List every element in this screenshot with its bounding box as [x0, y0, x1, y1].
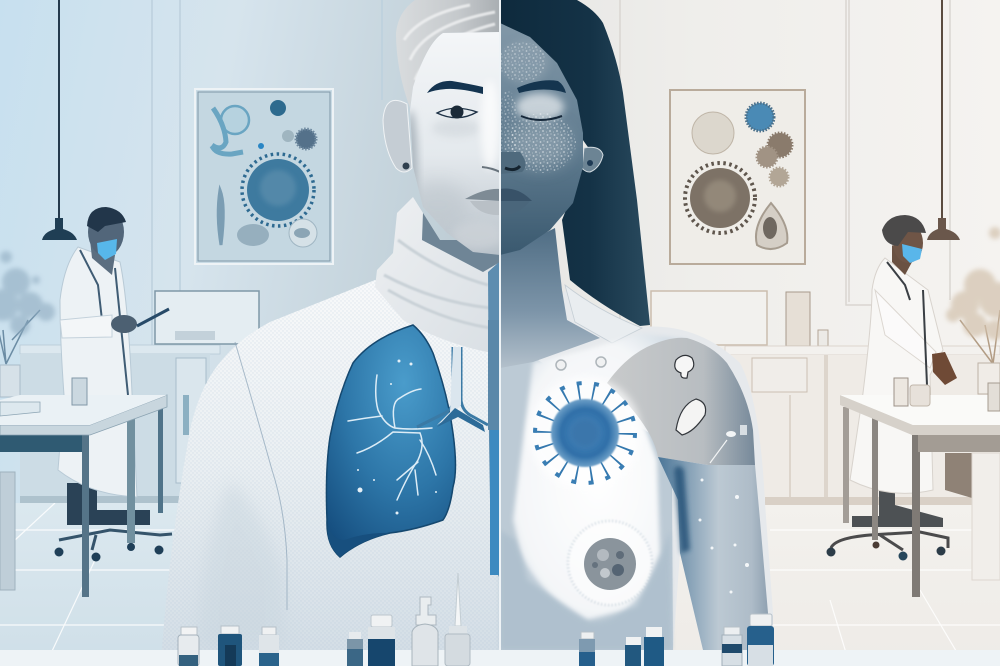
left ear	[383, 100, 412, 172]
coat sleeve	[875, 290, 936, 368]
bottom shelf	[0, 650, 1000, 666]
poster blue cell	[746, 103, 774, 131]
neck left	[422, 213, 500, 272]
poster virus brown	[685, 163, 755, 233]
tablet	[137, 309, 169, 326]
lower shade	[500, 530, 672, 650]
right brow	[517, 80, 566, 93]
poster disc	[692, 112, 734, 154]
coat lapel	[80, 250, 128, 395]
sleeve shading	[199, 480, 285, 648]
trachea and bronchus	[417, 262, 499, 577]
wall panels right	[620, 0, 950, 345]
centre split line	[499, 0, 501, 651]
lab coat	[58, 247, 137, 497]
plant pot left	[0, 365, 20, 397]
earring	[587, 160, 593, 166]
neck and chest strap	[500, 228, 600, 368]
right face shading	[498, 40, 576, 173]
medicine bottles	[178, 573, 774, 666]
right closed eye	[521, 116, 562, 120]
hair bun	[882, 215, 926, 246]
hair strands	[404, 5, 495, 80]
chest panel	[513, 333, 690, 620]
shirt band	[565, 285, 642, 343]
bottle 3	[259, 627, 279, 666]
figure: left half sweater body	[162, 280, 500, 650]
small deposit	[710, 425, 747, 463]
counter right	[651, 291, 1000, 497]
table top	[840, 395, 1000, 425]
skin deposit 1	[675, 355, 694, 378]
side of torso	[500, 358, 673, 650]
chair left	[54, 530, 172, 562]
bottle 9	[722, 627, 742, 666]
shoulder muscle	[607, 338, 755, 465]
forehead speckles	[501, 42, 544, 82]
poster virus	[242, 154, 314, 226]
legs	[872, 418, 878, 540]
dropper bottle	[445, 573, 470, 666]
bottle 7	[625, 637, 641, 666]
right nose shade	[500, 152, 526, 174]
left lips	[465, 189, 500, 215]
left eye	[437, 108, 477, 118]
spray bottle	[412, 597, 438, 666]
silhouette	[500, 290, 773, 650]
plant left	[0, 251, 55, 364]
background: left clinic wall	[0, 0, 500, 666]
mask	[97, 239, 117, 260]
hands	[932, 352, 957, 385]
poster small cells	[258, 100, 316, 149]
figure: right half head	[498, 23, 603, 255]
table top	[0, 395, 167, 425]
skin deposit 2	[676, 399, 706, 435]
hanging lamp right	[927, 0, 960, 240]
counter left	[20, 345, 220, 503]
lab coat	[850, 258, 943, 493]
left hair	[396, 0, 500, 108]
floor right	[660, 505, 1000, 666]
stethoscope	[887, 262, 927, 385]
neck	[892, 245, 912, 275]
papers	[0, 402, 40, 416]
doctor right	[850, 215, 957, 527]
background: right clinic wall	[500, 0, 1000, 666]
bottle 2	[218, 626, 242, 666]
armpit shadow	[674, 466, 690, 553]
mask	[902, 244, 922, 263]
glass	[72, 378, 87, 405]
poster organ swirl	[212, 106, 249, 154]
poster egg cell	[756, 203, 787, 249]
coat sleeve	[60, 315, 112, 338]
head	[88, 208, 124, 256]
sleeve seam	[235, 342, 287, 610]
cabinet	[972, 453, 1000, 580]
bottle 4	[347, 632, 363, 666]
trousers	[67, 483, 150, 525]
poster brown cells	[757, 133, 792, 186]
apron	[0, 435, 82, 452]
left iris	[450, 106, 464, 118]
figure: right half torso	[500, 228, 773, 650]
apron	[918, 435, 1000, 452]
hand	[111, 315, 137, 333]
bottle 6	[579, 632, 595, 666]
virus on chest	[529, 377, 641, 489]
lower arm	[658, 457, 768, 650]
left nostril	[482, 167, 500, 172]
left brow	[427, 81, 483, 94]
collar buttons	[556, 357, 606, 370]
figure: left half head	[383, 0, 503, 272]
head skin	[893, 223, 923, 263]
baseboard right	[765, 497, 1000, 505]
table left	[0, 378, 167, 597]
floor tile lines	[0, 503, 1000, 666]
hanging lamp left	[42, 0, 77, 240]
left face shading	[410, 86, 499, 248]
doctor left	[58, 207, 169, 525]
right face	[500, 23, 583, 255]
lung bronchi	[348, 375, 436, 500]
figure: right half hair	[500, 0, 650, 326]
right lips	[500, 188, 532, 215]
plant right	[946, 227, 1000, 364]
turtleneck collar	[375, 197, 500, 352]
chair right	[826, 532, 948, 560]
lung specks	[357, 360, 437, 514]
lung	[326, 325, 456, 557]
bottle 5	[368, 615, 395, 666]
poster left	[195, 89, 333, 264]
poster right	[670, 90, 805, 264]
left face	[410, 32, 500, 255]
edge	[840, 395, 1000, 435]
neck	[90, 240, 115, 275]
bottle 10	[747, 614, 774, 666]
cabinet left	[0, 472, 15, 590]
legs	[127, 417, 135, 543]
glass 2	[988, 383, 1000, 411]
table right	[840, 378, 1000, 597]
tumor on chest	[568, 521, 652, 605]
glass	[894, 378, 908, 406]
lung fold	[328, 525, 390, 557]
plant pot right	[978, 363, 1000, 394]
poster specimens	[218, 190, 317, 247]
arm sparkles	[698, 478, 749, 594]
wall panels left	[152, 0, 382, 345]
right ear	[582, 147, 603, 172]
bottle 8	[644, 627, 664, 666]
edge	[0, 395, 167, 435]
cheek speckles	[508, 113, 576, 173]
bottle 1	[178, 627, 199, 666]
bowls	[910, 385, 930, 406]
earring	[402, 162, 410, 170]
hair	[87, 207, 126, 232]
shoes and seat	[852, 490, 943, 527]
trousers behind	[945, 453, 972, 498]
monitor left	[155, 291, 259, 344]
floor left	[0, 503, 220, 666]
